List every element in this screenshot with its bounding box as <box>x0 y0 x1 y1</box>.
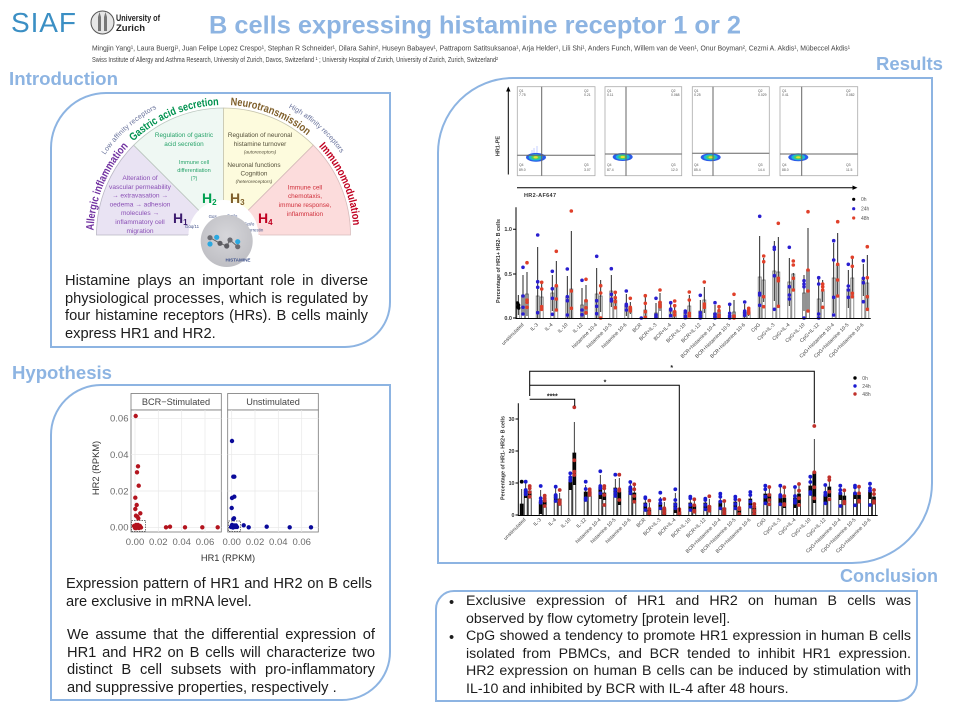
red dots <box>530 407 874 514</box>
x labels <box>501 322 866 360</box>
y axis title: Percentage of HR1+ HR2- B cells <box>496 219 502 303</box>
flow plot 3: Q3 <box>758 163 763 167</box>
scatter axes text: 0.06 <box>196 537 214 548</box>
flow plot 4 <box>780 87 858 176</box>
x labels: BCR+IL-12 <box>685 517 708 539</box>
receptor labels: 1 <box>183 218 188 227</box>
H3 text: Regulation of neuronal <box>228 132 292 139</box>
H1 text: vascular permeability <box>109 184 172 191</box>
x labels: BCR+IL-10 <box>670 517 693 539</box>
H1 text <box>109 175 172 235</box>
blue dots <box>523 216 863 318</box>
heading: Results: Results <box>876 53 943 74</box>
H1 text: molecules → <box>121 210 159 217</box>
arc labels: Allergic inflammation <box>86 144 128 230</box>
scatter axes text: 0.00 <box>110 523 128 534</box>
receptor labels: 3 <box>240 198 245 207</box>
H1 text: inflammatory cell <box>115 219 165 226</box>
x labels: CpG+histamine 10-4 <box>805 517 843 555</box>
flow plot 1: 0.21 <box>584 93 591 97</box>
y tick labels: 10 <box>509 481 515 487</box>
scatter axes text: 0.04 <box>110 450 128 461</box>
H2 text: (?) <box>191 176 198 182</box>
text: expression pattern <box>66 576 372 614</box>
legend: 24h <box>862 384 871 390</box>
H4 text: Immune cell <box>288 184 322 192</box>
chart: HR1 vs HR2 scatter: HR1 (RPKM) <box>201 553 255 563</box>
text: introduction paragraph: physiological processes, which is regulated by <box>65 291 368 307</box>
significance brackets: * <box>670 365 673 372</box>
y tick labels: 30 <box>509 417 515 423</box>
arc labels: Gastric acid secretion <box>130 98 218 140</box>
authors and affiliations: Mingjin Yang¹, Laura Buergi¹, Juan Felipe Lopez Crespo¹, Stephan R Schneider¹, Dilara Sahin², Huseyn Babayev¹, Pattraporn Satitsuksanoa¹, Arja Helder¹, Lili Shi¹, Anders Funch, Willem van de Veen¹, Onur Boyman², Cezmi A. Akdis¹, Mübeccel Akdis¹ <box>92 44 850 52</box>
arc labels <box>86 98 360 230</box>
x labels: BCR <box>636 517 648 529</box>
x labels: CpG+IL-4 <box>777 517 798 537</box>
x labels: BCR+IL-12 <box>680 322 703 344</box>
y tick labels: 1.0 <box>504 227 512 233</box>
x labels: IL-3 <box>529 322 540 333</box>
H1 text: Alteration of <box>122 175 158 182</box>
affinity labels: High affinity receptors <box>289 104 344 153</box>
x labels <box>503 517 873 555</box>
scatter axes text: 0.00 <box>222 537 241 548</box>
significance brackets: * <box>604 380 607 386</box>
x labels: IL-10 <box>560 517 573 530</box>
legend: 48h <box>861 216 870 222</box>
scatter axes text: 0.06 <box>110 414 128 424</box>
flow plot 2: Q2 <box>671 89 676 93</box>
scatter axes text: 0.02 <box>149 537 168 548</box>
x labels: BCR+IL-3 <box>642 517 663 537</box>
flow plot 1: 7.75 <box>519 93 526 97</box>
x labels: BCR <box>632 322 644 334</box>
text: assumption: and suppressive properties, respectively . <box>67 680 337 696</box>
heading: Hypothesis: Hypothesis <box>12 362 112 383</box>
flow plot 2: 87.4 <box>607 168 614 172</box>
scatter axes text: 0.02 <box>246 537 264 548</box>
text: conclusion points: Exclusive expression of HR1 and HR2 on human B cells was <box>466 593 911 609</box>
x labels: CpG+IL-12 <box>799 322 821 344</box>
G protein labels: Gαi/o <box>227 214 238 218</box>
error bars <box>522 422 874 515</box>
thick mean segments <box>522 453 874 515</box>
H4 text: inflammation <box>287 211 324 218</box>
receptor labels: H <box>230 190 240 206</box>
arrow: HR2-AF647 axis: HR2-AF647 <box>524 193 556 199</box>
chart: percentage of HR1+ HR2- B cells <box>496 197 871 360</box>
chart: HR1 vs HR2 scatter <box>91 394 318 563</box>
text: conclusion points: observed by flow cytometry [protein level]. <box>466 611 730 627</box>
H3 text: histamine turnover <box>234 141 287 148</box>
x labels: IL-12 <box>575 517 588 530</box>
logo: SIAF: SIAF <box>11 7 76 38</box>
flow plot 1: Q2 <box>584 89 589 93</box>
black dots <box>518 303 519 308</box>
flow plot 2: 12.0 <box>671 168 678 172</box>
flow plot 3: 0.25 <box>694 93 701 97</box>
text: introduction paragraph <box>65 273 368 345</box>
legend: 0h <box>862 376 868 382</box>
text: conclusion points: isolated from PBMCs, and BCR tended to inhibit HR1 expression. <box>466 646 911 662</box>
x labels: IL-4 <box>547 517 558 528</box>
H1 text: oedema → adhesion <box>110 202 171 208</box>
scatter axes text: 0.02 <box>110 486 128 497</box>
black dots <box>520 480 524 484</box>
flow plot 4: 11.5 <box>846 168 852 172</box>
H4 text: chemotaxis, <box>288 193 322 200</box>
receptor labels: H <box>202 190 212 206</box>
bullets: • <box>449 595 454 611</box>
scatter axes text: 0.06 <box>292 537 311 548</box>
arc labels: Neurotransmission <box>231 98 310 136</box>
legend <box>852 197 870 222</box>
flow plot 1: 3.07 <box>584 168 591 172</box>
G protein labels: Gαi/o <box>244 222 255 226</box>
x labels: BCR+histamine 10-5 <box>694 322 732 360</box>
flow plot 3: Q4 <box>694 163 699 167</box>
flow plot 3: Q1 <box>694 89 699 93</box>
flow plot 1: Q1 <box>519 89 524 93</box>
diagram: histamine receptors fan <box>86 98 360 267</box>
H4 text <box>279 184 332 218</box>
G protein labels: β-arrestin <box>245 228 264 232</box>
x labels: CpG+histamine 10-5 <box>813 322 851 360</box>
panel: conclusion <box>436 591 917 701</box>
chart: HR1 vs HR2 scatter: HR2 (RPKM) <box>91 441 101 495</box>
x labels: IL-12 <box>572 322 585 335</box>
y tick labels: 0.5 <box>504 272 512 278</box>
title: B cells expressing histamine receptor 1 or 2 <box>209 12 741 40</box>
flow plot 4: 0.082 <box>846 93 855 97</box>
H1 text: migration <box>126 228 154 235</box>
H2 text <box>155 132 214 182</box>
flow plot 3 <box>692 87 769 176</box>
panel: introduction <box>50 92 391 348</box>
flow plot 4: Q1 <box>782 89 787 93</box>
x labels: histamine 10-6 <box>601 322 629 350</box>
axes <box>513 207 871 318</box>
legend: 0h <box>861 197 867 203</box>
x labels: CpG+IL-10 <box>784 322 807 344</box>
flow cytometry plots <box>496 86 858 199</box>
red dots <box>527 211 867 318</box>
flow plot 3: 0.029 <box>758 93 767 97</box>
x labels: IL-10 <box>557 322 570 335</box>
text: assumption: distinct B cell subsets with pro-inflammatory <box>67 662 375 678</box>
legend <box>853 376 871 398</box>
scatter axes text: 0.04 <box>269 537 288 548</box>
bars <box>517 265 869 318</box>
heading: Introduction: Introduction <box>9 68 118 89</box>
bars <box>520 453 876 515</box>
affinity labels <box>101 104 344 154</box>
x labels: BCR+IL-4 <box>653 322 673 342</box>
text: introduction paragraph: Histamine plays an important role in diverse <box>65 273 368 289</box>
flow plot 4: 0.41 <box>782 93 789 97</box>
H2 text: differentiation <box>177 168 211 174</box>
H4 text: immune response, <box>279 202 332 209</box>
arc labels: Immunomodulation <box>319 142 360 225</box>
x labels: BCR+histamine 10-6 <box>709 322 747 360</box>
y axis title: Percentage of HR1- HR2+ B cells <box>500 416 506 500</box>
logo: University of Zurich: University of <box>116 13 161 24</box>
H1 text: → extravasation → <box>112 192 168 200</box>
flow plot 2: Q1 <box>607 89 612 93</box>
x labels: histamine 10-5 <box>590 517 618 545</box>
panel: results <box>438 78 932 563</box>
y tick labels: 0 <box>512 513 515 519</box>
scatter facet: Unstimulated: Unstimulated <box>246 397 300 407</box>
receptor labels: 2 <box>212 198 217 207</box>
text: conclusion points <box>466 593 911 701</box>
heading: Conclusion: Conclusion <box>840 565 938 586</box>
x labels: IL-3 <box>532 517 543 528</box>
x labels: histamine 10-5 <box>586 322 614 350</box>
H3 text <box>227 132 292 185</box>
flow plot 2: Q4 <box>607 163 612 167</box>
G protein labels: Gαq/11 <box>185 224 200 229</box>
x labels: histamine 10-6 <box>605 517 633 545</box>
text: introduction paragraph: four histamine receptors (HRs). B cells mainly <box>65 308 368 324</box>
error bars <box>518 228 867 318</box>
G protein labels <box>185 214 264 232</box>
flow plot 4: Q4 <box>782 163 787 167</box>
y tick labels: 20 <box>509 449 515 455</box>
icon: histamine molecule <box>201 215 253 267</box>
arrow: HR1-PE axis: HR1-PE <box>496 136 502 156</box>
text: expression pattern: are exclusive in mRNA level. <box>66 594 252 610</box>
y tick labels: 0.0 <box>504 316 512 322</box>
x labels: BCR+IL-3 <box>638 322 659 342</box>
flow plot 2: 0.068 <box>671 93 680 97</box>
arrow: HR1-PE axis <box>496 86 510 174</box>
text: assumption <box>67 627 375 699</box>
x labels: CpG+IL-3 <box>762 517 783 537</box>
arrow: HR2-AF647 axis <box>517 186 858 199</box>
legend: 48h <box>862 392 871 398</box>
y tick labels <box>509 417 515 519</box>
text: conclusion points: CpG showed a tendency to promote HR1 expression in human B cells <box>466 628 911 644</box>
x labels: BCR+histamine 10-6 <box>715 517 753 555</box>
x labels: unstimulated <box>503 517 528 542</box>
x labels: CpG+histamine 10-5 <box>820 517 858 555</box>
text: introduction paragraph: express HR1 and HR2. <box>65 326 216 342</box>
scatter axes text: 0.00 <box>126 537 144 548</box>
text: assumption: We assume that the differential expression of <box>67 627 375 643</box>
text: expression pattern: Expression pattern of HR1 and HR2 on B cells <box>66 576 372 592</box>
flow plot 3: 14.4 <box>758 168 765 172</box>
x labels: BCR+histamine 10-4 <box>680 322 718 360</box>
text: assumption: HR1 and HR2 on B cells will characterize two <box>67 645 375 661</box>
x labels: CpG+IL-12 <box>805 517 828 539</box>
authors and affiliations: Swiss Institute of Allergy and Asthma Research, University of Zurich, Davos, Switzerland ¹ ; University Hospital of Zurich, University of Zurich, Zurich, Switzerland² <box>92 55 498 64</box>
scatter facet: BCR-Stimulated: BCR−Stimulated <box>142 397 210 407</box>
x labels: CpG+histamine 10-4 <box>799 322 836 360</box>
H3 text: (autoreceptors) <box>244 150 277 156</box>
flow plot 1: Q4 <box>519 163 524 167</box>
chart: percentage of HR1- HR2+ B cells <box>500 365 878 555</box>
blue dots <box>526 471 870 510</box>
x labels: CpG+IL-4 <box>771 322 792 342</box>
H2 text: acid secretion <box>164 141 204 148</box>
scatter facet: Unstimulated <box>228 394 318 532</box>
x labels: CpG+histamine 10-6 <box>835 517 873 555</box>
x labels: histamine 10-4 <box>575 517 603 545</box>
flow plot 4: Q3 <box>846 163 851 167</box>
logo: University of Zurich: Zurich <box>116 23 145 34</box>
receptor labels <box>173 190 273 227</box>
x labels: CpG+IL-3 <box>756 322 777 342</box>
H2 text: Regulation of gastric <box>155 132 214 139</box>
receptor labels: 4 <box>268 218 273 227</box>
H2 text: Immune cell <box>179 160 209 166</box>
bullets: • <box>449 630 454 646</box>
x labels: CpG <box>750 322 762 334</box>
panel: hypothesis <box>51 385 390 700</box>
significance brackets: **** <box>547 394 558 400</box>
scatter facet: BCR-Stimulated <box>131 394 221 532</box>
x labels: BCR+histamine 10-4 <box>685 517 723 555</box>
x labels: unstimulated <box>501 322 526 347</box>
flow plot 4: 88.0 <box>782 168 789 172</box>
x labels: CpG+IL-10 <box>790 517 813 539</box>
H3 text: (heteroreceptors) <box>236 179 273 185</box>
text: conclusion points: HR2 expression on human B cells can be induced by stimulation with <box>466 663 911 679</box>
flow plot 2: 0.11 <box>607 93 613 97</box>
x labels: BCR+IL-4 <box>657 517 678 537</box>
y tick labels <box>504 227 512 322</box>
flow plot 3: 85.4 <box>694 168 701 172</box>
x labels: CpG+histamine 10-6 <box>828 322 866 360</box>
H3 text: Neuronal functions <box>227 162 281 169</box>
x labels: histamine 10-4 <box>571 322 599 350</box>
axes <box>516 403 878 516</box>
x labels: IL-4 <box>544 322 555 333</box>
flow plot 1 <box>517 87 595 176</box>
significance brackets <box>530 365 814 512</box>
flow plot 2: Q3 <box>671 163 676 167</box>
H3 text: Cognition <box>240 170 268 178</box>
x labels: CpG <box>756 517 767 529</box>
icon: histamine molecule: HISTAMINE <box>226 258 250 262</box>
x labels: BCR+IL-10 <box>665 322 688 344</box>
affinity labels: Low affinity receptors <box>101 106 156 154</box>
G protein labels: Gαs <box>209 214 218 219</box>
receptor labels: H <box>173 210 183 226</box>
text: conclusion points: IL-10 and inhibited by BCR with IL-4 after 48 hours. <box>466 681 789 697</box>
flow plot 3: Q2 <box>758 89 763 93</box>
authors and affiliations <box>92 44 850 64</box>
x labels: BCR+histamine 10-5 <box>700 517 738 555</box>
bullets <box>449 595 454 646</box>
scatter axes text: 0.04 <box>172 537 191 548</box>
flow plot 1: 89.0 <box>519 168 526 172</box>
legend: 24h <box>861 206 870 212</box>
flow plot 4: Q2 <box>846 89 851 93</box>
flow plot 2 <box>605 87 682 176</box>
scatter axes text <box>110 414 311 548</box>
receptor labels: H <box>258 210 268 226</box>
logo: University of Zurich <box>91 11 161 34</box>
flow plot 1: Q3 <box>584 163 589 167</box>
